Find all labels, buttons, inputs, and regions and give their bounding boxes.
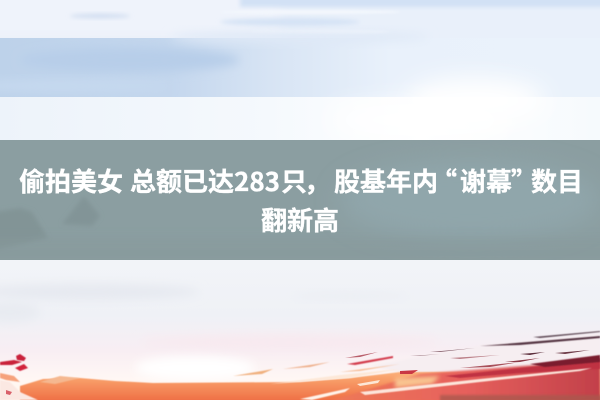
white strokes across ground	[360, 368, 592, 395]
title text: 股基年内	[334, 162, 438, 199]
title text: 283	[234, 162, 280, 199]
title text	[19, 162, 583, 238]
title text: 总额已达	[130, 162, 234, 199]
orange ground and red brush strokes	[0, 331, 600, 400]
title text: ”	[511, 162, 537, 199]
title banner	[0, 140, 600, 260]
lower sky	[0, 260, 600, 400]
orange strokes above ground	[233, 369, 273, 376]
upper sky	[0, 0, 600, 140]
white speckled sky patch at right	[370, 333, 600, 376]
blue cloud band	[0, 38, 600, 97]
title text: 只	[281, 162, 307, 199]
title text: “	[431, 162, 457, 199]
title text: 翻新高	[261, 201, 339, 238]
sun glow	[405, 78, 545, 122]
dark fine streaks	[480, 336, 600, 346]
title text: 谢幕	[460, 162, 512, 199]
red streaks	[347, 356, 393, 365]
red splatter at left	[16, 354, 26, 361]
banner background with faint hills	[0, 140, 600, 260]
ground fill	[20, 362, 600, 400]
pale band below the blue	[0, 97, 600, 140]
title text: 数目	[531, 162, 583, 199]
title text: 偷拍美女	[19, 162, 123, 199]
title text: ，	[304, 162, 330, 199]
